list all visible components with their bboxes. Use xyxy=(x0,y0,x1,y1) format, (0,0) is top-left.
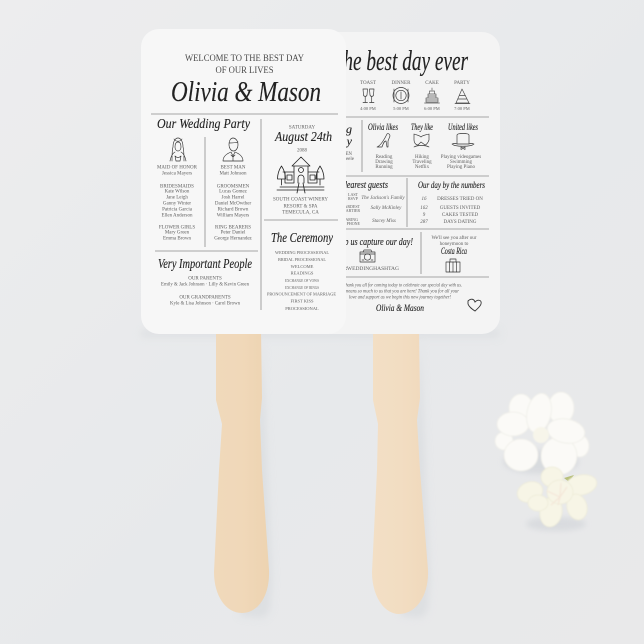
ceremony order: PROCESSIONAL xyxy=(285,306,319,311)
honeymoon text: We'll see you after our xyxy=(432,236,477,241)
ceremony order: WEDDING PROCESSIONAL xyxy=(275,250,329,255)
lists: Playing Piano xyxy=(447,165,475,170)
parents xyxy=(161,276,249,288)
headings: likes: Olivia likes xyxy=(368,122,398,132)
section: dearest guests xyxy=(328,180,405,226)
divider lines xyxy=(330,117,489,277)
section: likes xyxy=(340,122,481,170)
venue text: TEMECULA, CA xyxy=(282,210,319,216)
lists: Running xyxy=(375,165,393,170)
heading: Our Wedding Party: Our Wedding Party xyxy=(157,116,250,131)
icon: suitcase xyxy=(446,259,460,272)
lists xyxy=(375,155,481,170)
guest list xyxy=(341,192,405,226)
lists: Playing videogames xyxy=(441,155,481,160)
left column names: Ganny Winter xyxy=(163,202,191,206)
signature: Olivia & Mason xyxy=(376,304,424,314)
welcome heading: WELCOME TO THE BEST DAY xyxy=(185,53,304,63)
icon: top hat and bow tie xyxy=(452,134,474,150)
grandparents: OUR GRANDPARENTS xyxy=(179,296,231,300)
left column names: MAID OF HONOR xyxy=(157,166,198,170)
guest list: HARDEST xyxy=(342,204,361,209)
guest list: STARING xyxy=(341,217,358,222)
timeline: 7:00 PM xyxy=(454,106,470,111)
parents: Emily & Jack Johnson · Lilly & Kevin Green xyxy=(161,282,249,288)
handle: front fan xyxy=(214,330,269,613)
guest list: LAST xyxy=(348,192,359,197)
ceremony order: WELCOME xyxy=(291,264,314,269)
section: date and venue xyxy=(273,126,332,216)
venue text: RESORT & SPA xyxy=(284,204,318,210)
heading: Very Important People: Very Important People xyxy=(158,256,252,271)
icon: bride xyxy=(170,138,186,161)
timeline: PARTY xyxy=(454,81,470,86)
grandparents xyxy=(170,296,240,306)
section: likes: y xyxy=(346,134,353,148)
venue text: SOUTH COAST WINERY xyxy=(273,198,328,202)
ceremony order xyxy=(267,250,336,311)
date xyxy=(274,126,332,154)
welcome heading: OF OUR LIVES xyxy=(216,65,274,75)
right column names: George Hernandez xyxy=(214,236,253,242)
left column names: Emma Brown xyxy=(163,236,191,242)
numbers: DRESSES TRIED ON xyxy=(437,197,483,202)
right column names: Josh Harrel xyxy=(222,196,245,200)
ceremony order: BRIDAL PROCESSIONAL xyxy=(278,257,326,262)
icon: tiered cake xyxy=(424,88,440,103)
section: likes: United likes xyxy=(448,122,478,132)
date: August 24th xyxy=(274,130,332,145)
ceremony order: READINGS xyxy=(291,270,314,275)
guest list: AT PHONE xyxy=(341,221,361,226)
flower: large xyxy=(495,391,589,475)
section: honeymoon: honeymoon to xyxy=(440,242,469,247)
thank you message: We thank you all for coming today to celebrate our special day with us. xyxy=(338,284,462,288)
lists: Netflix xyxy=(415,165,430,170)
timeline times: 4:00 PM xyxy=(360,106,376,111)
thank you message: It means so much to us that you are here! Thank you for all your xyxy=(340,290,459,294)
hashtag text: #OURWEDDINGHASHTAG xyxy=(333,266,399,272)
section: very important people xyxy=(158,256,252,306)
heading: day by the numbers: Our day by the numbers xyxy=(418,180,485,190)
timeline: 5:00 PM xyxy=(393,106,409,111)
card: front xyxy=(141,29,346,334)
left column names: Ellen Anderson xyxy=(162,214,193,218)
divider lines xyxy=(151,114,338,310)
icon: camera xyxy=(360,250,375,262)
thank you message: love and support as we begin this new journey together! xyxy=(349,296,451,300)
numbers: 9 xyxy=(423,213,426,218)
section: ceremony xyxy=(267,230,336,311)
ceremony order: FIRST KISS xyxy=(290,298,314,304)
left column names: Jessica Mayers xyxy=(162,172,192,176)
timeline: 6:00 PM xyxy=(424,106,440,111)
icon: dinner plate xyxy=(393,88,409,104)
section: likes: EN xyxy=(345,152,352,157)
guest list: PARTIER xyxy=(344,208,360,213)
numbers: GUESTS INVITED xyxy=(440,206,481,211)
section: hashtag xyxy=(332,236,413,272)
section: wedding party xyxy=(157,116,253,242)
icon: champagne glasses xyxy=(363,89,374,102)
lists: Traveling xyxy=(412,160,432,165)
guest list: The Jackson's Family xyxy=(361,196,405,201)
destination: Costa Rica xyxy=(441,246,467,256)
ceremony order: PRONOUNCEMENT OF MARRIAGE xyxy=(267,292,336,296)
icon: high heel xyxy=(377,134,390,147)
section: likes: They like xyxy=(411,122,433,132)
right column names: BEST MAN xyxy=(220,166,246,170)
heading: the best day ever: the best day ever xyxy=(338,45,468,77)
lists: Reading xyxy=(376,155,393,160)
guest list: Stacey Miss xyxy=(372,219,396,224)
right column names: Matt Johnson xyxy=(219,172,247,176)
hidden section fragments: ng xyxy=(340,122,352,136)
names: Olivia & Mason: Olivia & Mason xyxy=(171,76,321,108)
right column names: GROOMSMEN xyxy=(217,184,250,190)
right column names: RING BEARERS xyxy=(215,226,251,230)
numbers: DAYS DATING xyxy=(443,220,477,225)
soft shadows xyxy=(141,330,499,618)
left column names: Patricia Garcia xyxy=(162,208,193,212)
handle: back fan xyxy=(372,330,428,614)
right column names: Lucas Gomez xyxy=(219,190,248,194)
lists: Drawing xyxy=(375,160,393,165)
right column names: Richard Brown xyxy=(218,208,249,212)
section: likes: Steele xyxy=(342,157,355,162)
ceremony order: EXCHANGE OF VOWS xyxy=(285,278,319,283)
flowers xyxy=(495,391,599,531)
numbers xyxy=(420,197,483,225)
numbers: 287 xyxy=(420,220,428,225)
icon: masks xyxy=(414,134,429,147)
heading: The Ceremony: The Ceremony xyxy=(271,230,333,245)
thank you message xyxy=(338,284,462,314)
lists: Swimming xyxy=(450,160,472,165)
timeline: DINNER xyxy=(392,81,411,86)
timeline xyxy=(360,81,470,111)
left column names: Jane Leigh xyxy=(166,196,188,200)
left column names: BRIDESMAIDS xyxy=(160,184,194,190)
welcome heading xyxy=(185,53,304,75)
date: 2088 xyxy=(297,148,308,154)
venue text xyxy=(273,198,328,216)
panel: back of fan xyxy=(320,32,500,334)
right column names: Daniel McOwther xyxy=(215,202,251,206)
right column names xyxy=(214,166,253,242)
section: honeymoon xyxy=(432,236,477,272)
numbers: 16 xyxy=(422,197,427,202)
flower: small xyxy=(514,467,599,531)
icon: party gramophone xyxy=(455,89,470,104)
timeline labels: TOAST xyxy=(360,81,376,86)
panel: front of fan xyxy=(141,29,346,334)
left column names: FLOWER GIRLS xyxy=(159,226,195,230)
left column names xyxy=(157,166,198,242)
icon: heart xyxy=(468,299,481,311)
heading: dearest guests: Our dearest guests xyxy=(328,180,388,191)
ceremony order: EXCHANGE OF RINGS xyxy=(285,285,319,290)
date: SATURDAY xyxy=(289,126,315,130)
lists: Hiking xyxy=(415,155,429,160)
right column names: Peter Daniel xyxy=(221,230,246,236)
card: back xyxy=(320,32,500,334)
timeline: CAKE xyxy=(425,81,439,86)
left column names: Mary Green xyxy=(165,230,190,236)
guest list: Sally McKinley xyxy=(371,206,402,211)
icon: venue building xyxy=(277,157,324,193)
right column names: William Mayers xyxy=(217,214,249,218)
left column names: Kate Wilson xyxy=(165,190,190,194)
numbers: 162 xyxy=(420,206,428,211)
parents: OUR PARENTS xyxy=(188,276,222,282)
numbers: CAKES TESTED xyxy=(442,213,478,218)
guest list: RSVP xyxy=(348,196,359,201)
grandparents: Kyle & Lisa Johnson · Carol Brown xyxy=(170,302,240,306)
heading: help us capture: Help us capture our day! xyxy=(332,236,413,248)
section: numbers xyxy=(418,180,485,225)
icon: groom xyxy=(223,138,243,161)
